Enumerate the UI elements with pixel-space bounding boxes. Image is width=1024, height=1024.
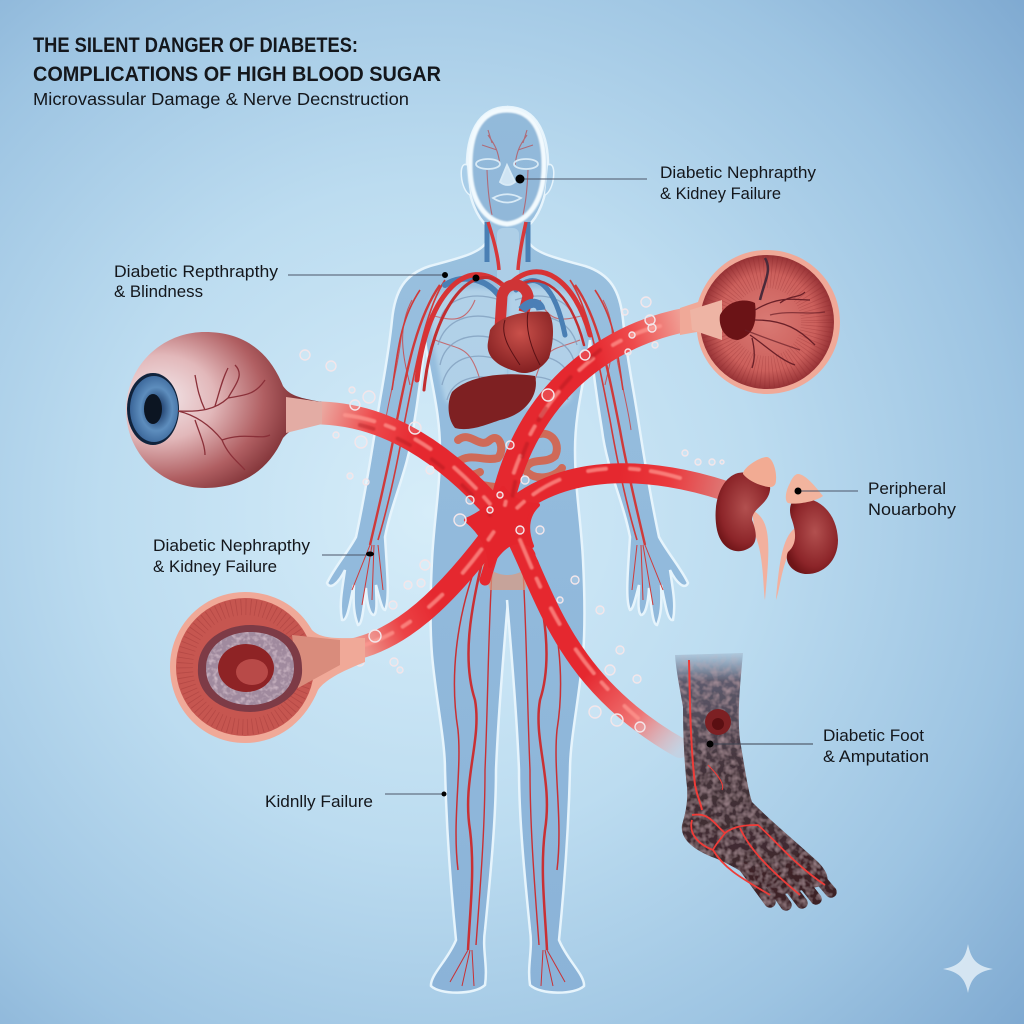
face and chest vessels [430, 130, 500, 380]
marker [706, 740, 714, 748]
surface striations [717, 272, 817, 372]
label: Diabetic Nephrapthy [153, 537, 311, 555]
callout: nephropathy left: & Kidney Failure [153, 558, 277, 576]
pupil [144, 394, 162, 424]
marker [516, 174, 524, 184]
plaque ring [198, 625, 302, 712]
label: Diabetic Foot [823, 727, 924, 745]
left adrenal [743, 457, 776, 487]
optic nerve [286, 397, 322, 433]
vessel hub [466, 488, 538, 566]
face features [476, 159, 538, 202]
glucose bubbles [300, 297, 724, 732]
high blood sugar vessel network [322, 319, 740, 748]
foot shape [675, 653, 831, 905]
label: Kidnlly Failure [265, 793, 373, 811]
body silhouette [327, 107, 508, 993]
ear [461, 164, 470, 195]
callout: diabetic foot [706, 727, 929, 766]
wall striations [185, 607, 305, 727]
head glow [470, 110, 544, 224]
lumen [218, 644, 274, 692]
leader line [798, 490, 858, 492]
marker [794, 488, 802, 494]
illustration: artery cross-section [170, 592, 365, 743]
neck arteries [487, 222, 528, 270]
title line 2: COMPLICATIONS OF HIGH BLOOD SUGAR [33, 63, 441, 86]
eye vessels [178, 365, 270, 470]
connecting neck [292, 635, 340, 688]
right adrenal [786, 474, 823, 504]
leader line [288, 274, 445, 276]
illustration: kidneys [716, 457, 838, 600]
ulcer [705, 709, 731, 735]
left ureter [752, 510, 768, 600]
chest lighter area [430, 288, 507, 409]
marker [442, 792, 446, 796]
glowing veins [689, 660, 825, 895]
title line 1: THE SILENT DANGER OF DIABETES: [33, 34, 358, 57]
leader line [710, 743, 813, 745]
label: Diabetic Repthrapthy [114, 263, 279, 281]
heart [488, 285, 553, 373]
subtitle: Microvassular Damage & Nerve Decnstruction [33, 89, 409, 109]
left kidney [716, 472, 770, 551]
right kidney [787, 497, 838, 574]
callout: diabetic foot: & Amputation [823, 748, 929, 766]
intestines [457, 425, 562, 487]
iris [127, 373, 179, 445]
vessel highlights [345, 326, 680, 720]
callout: peripheral neuropathy: Nouarbohy [868, 501, 957, 519]
label: Peripheral [868, 480, 946, 498]
illustration: eye [126, 332, 322, 488]
vessel to eye [322, 413, 500, 515]
liver [449, 374, 536, 429]
neck [690, 300, 722, 340]
callout: retinopathy [114, 263, 480, 301]
vessel to kidney [505, 473, 740, 515]
callout: nephropathy top right: & Kidney Failure [660, 185, 781, 203]
vessel to lower cross-section [350, 525, 500, 650]
right ureter [776, 525, 800, 600]
human body figure [327, 107, 688, 993]
vessel to foot [510, 525, 680, 748]
rib lines [438, 296, 500, 400]
neck and spine [497, 228, 519, 288]
inner surface [700, 255, 834, 389]
callout: nephropathy left [153, 537, 374, 576]
toes [745, 858, 831, 905]
sparkle watermark [943, 944, 993, 993]
leader line [322, 554, 372, 556]
dark optic opening [720, 301, 756, 340]
outer wall [170, 592, 365, 743]
arm arteries [352, 280, 445, 605]
callout: kidney failure [265, 792, 446, 811]
pelvis [480, 560, 535, 590]
callout: peripheral neuropathy [794, 480, 957, 519]
leader line [520, 178, 647, 180]
marker [366, 552, 374, 556]
aortic arches [417, 272, 590, 390]
callout: nephropathy top right [516, 164, 817, 203]
short lower branches [485, 515, 530, 580]
leg arteries [450, 550, 492, 986]
leader line [385, 793, 445, 795]
retinal vessels [745, 258, 825, 368]
title block [33, 34, 441, 109]
vessel to retina [500, 319, 690, 515]
label: Diabetic Nephrapthy [660, 164, 817, 182]
eyeball [126, 332, 322, 488]
callout: retinopathy: & Blindness [114, 283, 203, 301]
illustration: diabetic foot [675, 653, 831, 905]
outer wall [680, 250, 840, 394]
markers [442, 272, 480, 282]
illustration: retina cross-section [680, 250, 840, 394]
inner wall [176, 598, 314, 736]
mirrored half of body [507, 107, 688, 993]
